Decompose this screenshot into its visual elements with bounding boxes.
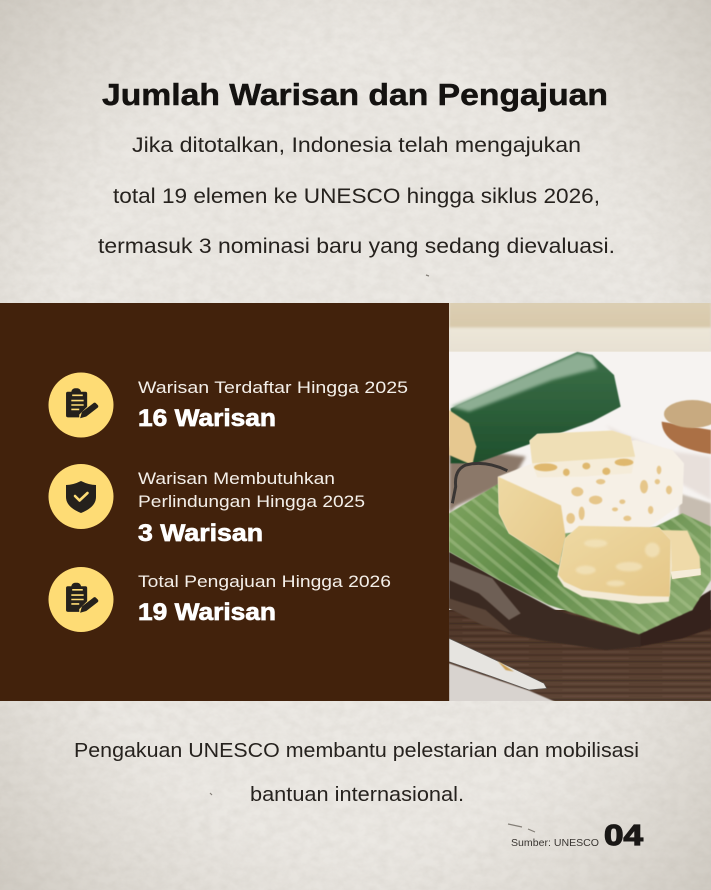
- title: Jumlah Warisan dan Pengajuan: [102, 77, 608, 112]
- stat: registered heritage: [48, 372, 408, 438]
- panel: statistics: [0, 303, 449, 701]
- closing statement: Pengakuan UNESCO membantu pelestarian dan mobilisasi: [74, 740, 639, 762]
- label: Perlindungan Hingga 2025: [138, 492, 365, 511]
- rear small slice: [661, 530, 701, 579]
- stat: total submissions: [48, 567, 391, 632]
- large tempeh block: [498, 440, 684, 565]
- icon: clipboard with pencil: [48, 567, 114, 632]
- banana leaf: [449, 483, 711, 634]
- wrapped tempeh: [451, 352, 621, 463]
- scissors: [452, 463, 507, 503]
- top tempeh slice: [530, 431, 635, 477]
- photo: tempeh on banana leaf: [449, 300, 711, 703]
- grey surface below knife: [449, 663, 559, 703]
- value: 3 Warisan: [138, 520, 263, 547]
- intro text block: termasuk 3 nominasi baru yang sedang dievaluasi.: [98, 235, 615, 258]
- value: 19 Warisan: [138, 599, 276, 626]
- plate edge: [679, 493, 711, 533]
- icon: clipboard with pencil: [48, 372, 114, 438]
- page number: 04: [604, 820, 643, 852]
- label: Total Pengajuan Hingga 2026: [138, 572, 391, 591]
- bowl: [662, 422, 711, 454]
- knife: [449, 638, 547, 690]
- label: Warisan Terdaftar Hingga 2025: [138, 378, 408, 397]
- intro text block: Jika ditotalkan, Indonesia telah mengajukan: [132, 134, 581, 157]
- label: [138, 469, 365, 511]
- bark: [449, 552, 641, 650]
- icon: shield with check: [48, 464, 114, 529]
- dark board: [639, 590, 711, 647]
- closing statement: [74, 740, 639, 806]
- closing statement: bantuan internasional.: [250, 784, 464, 806]
- front tempeh slice: [557, 526, 672, 604]
- brown table behind scissors: [449, 447, 526, 513]
- intro text block: [98, 134, 615, 258]
- pale table surface: [449, 352, 711, 538]
- intro text block: total 19 elemen ke UNESCO hingga siklus 2026,: [113, 185, 600, 208]
- stat: heritage needing protection: [48, 464, 365, 547]
- source credit: Sumber: UNESCO: [511, 837, 599, 849]
- wall: [449, 303, 711, 352]
- wooden table: [449, 610, 711, 703]
- value: 16 Warisan: [138, 405, 276, 432]
- label: Warisan Membutuhkan: [138, 469, 335, 488]
